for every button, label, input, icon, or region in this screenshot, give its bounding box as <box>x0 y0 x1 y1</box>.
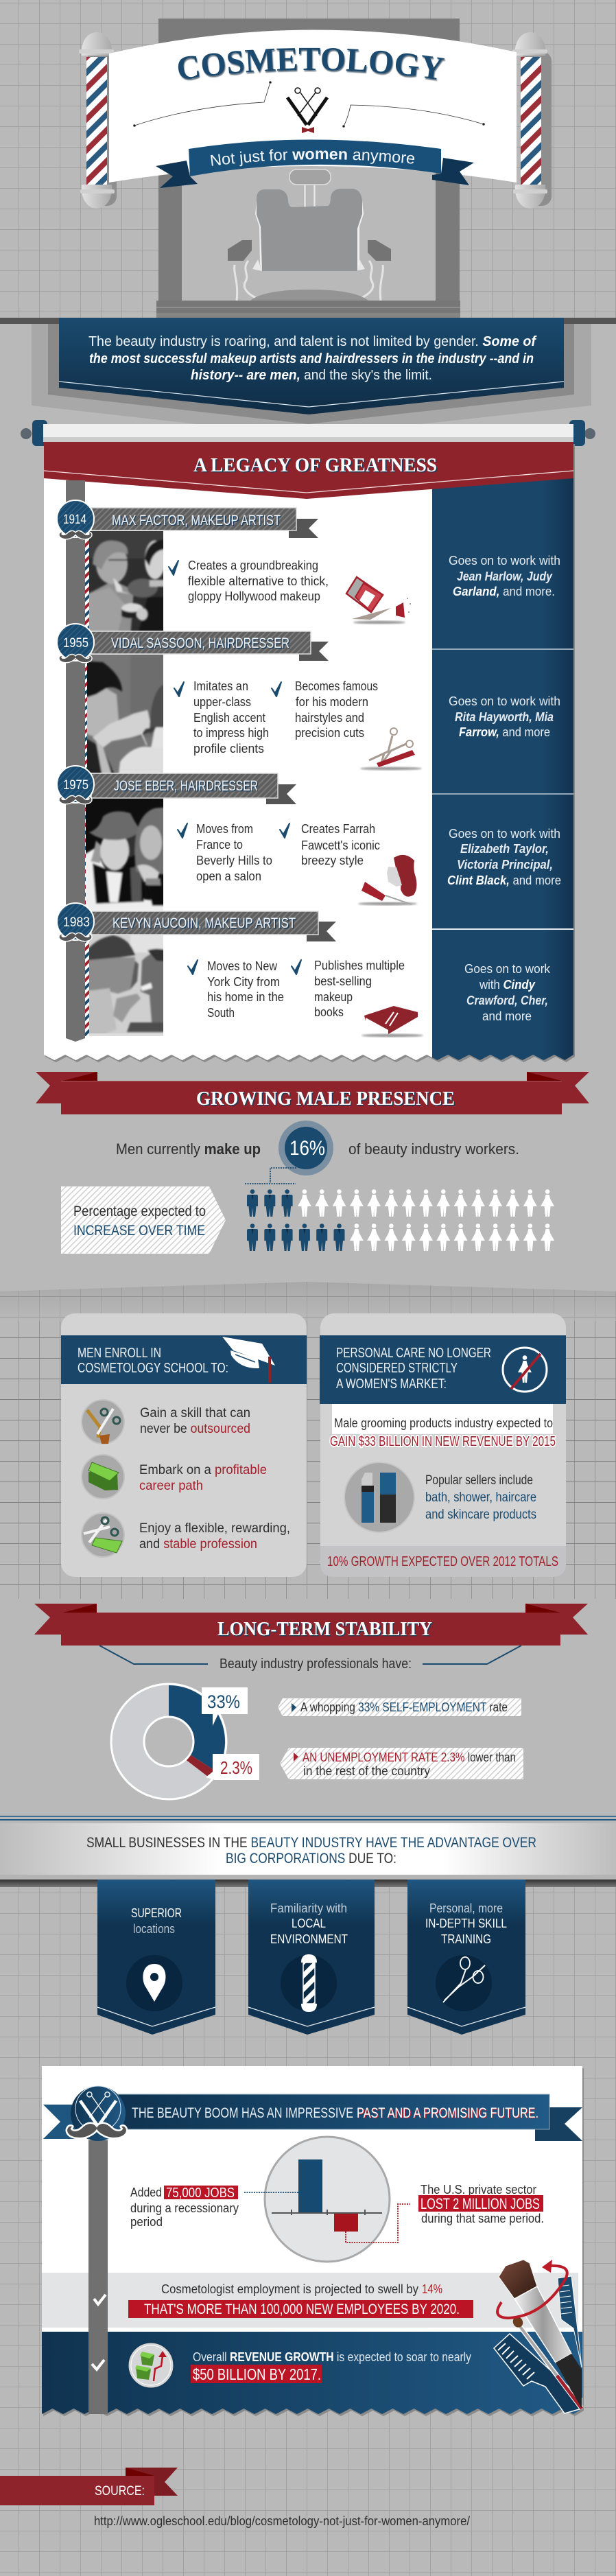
name badge <box>57 500 318 539</box>
section heading: A LEGACY OF GREATNESS <box>193 454 437 476</box>
accomplishments <box>178 822 380 883</box>
goes on to work with: Clint Black, and more <box>447 874 561 887</box>
tag: self-employment rate <box>278 1698 521 1716</box>
icon: graduation cap <box>222 1337 275 1383</box>
icon: map pin <box>126 1955 182 2011</box>
accomplishments: Becomes famous <box>295 679 378 693</box>
tag: unemployment rate: in the rest of the country <box>303 1764 430 1778</box>
panel header: PERSONAL CARE NO LONGER <box>336 1346 491 1361</box>
pennant: in-depth skill training: TRAINING <box>441 1932 491 1946</box>
small businesses band <box>0 1823 616 1887</box>
accomplishments: Beverly Hills to <box>196 854 272 867</box>
intro text: the most successful makeup artists and hairdressers in the industry --and in <box>89 351 534 366</box>
fact: employment projected to swell <box>128 2282 473 2318</box>
accomplishments: Moves to New <box>207 959 278 973</box>
icon: grooming bottles <box>344 1462 414 1532</box>
panel: men enroll in cosmetology school <box>61 1313 307 1577</box>
subheading with connector lines: Beauty industry professionals have: <box>220 1656 412 1672</box>
item: profitable career path: career path <box>139 1479 203 1493</box>
accomplishments: Creates Farrah <box>301 822 375 836</box>
icon: woman with curly hair and comb <box>358 855 417 906</box>
growth fact: Male grooming products industry expected to <box>334 1416 553 1430</box>
pictogram: workers row 1 <box>247 1189 554 1217</box>
source ribbon: SOURCE: <box>95 2484 145 2498</box>
accomplishments: York City from <box>207 975 280 989</box>
label: 2.3 percent: 2.3% <box>220 1757 252 1778</box>
name badge: 1983 <box>63 915 90 930</box>
accomplishments: profile clients <box>193 742 264 756</box>
scroll rod <box>21 420 595 446</box>
pennant: in-depth skill training <box>407 1880 525 2035</box>
subheading with connector lines <box>99 1646 521 1672</box>
goes on to work with: Victoria Principal, <box>457 858 553 871</box>
intro text <box>88 334 537 383</box>
popular sellers text: bath, shower, haircare <box>425 1490 536 1505</box>
icon: no women sign <box>503 1348 547 1392</box>
subtitle text: Not just for women anymore <box>211 150 414 166</box>
accomplishments: to impress high <box>193 726 269 740</box>
accomplishments: flexible alternative to thick, <box>188 574 329 588</box>
stat: men make up 16 percent: of beauty industry workers. <box>348 1140 519 1158</box>
tag: unemployment rate: AN UNEMPLOYMENT RATE 2.3% lower than <box>303 1750 516 1764</box>
goes on to work with: with Cindy <box>479 978 536 992</box>
fact: lost 2 million jobs <box>418 2183 544 2225</box>
timeline entry 1955 <box>57 624 560 780</box>
fact: revenue growth: Overall REVENUE GROWTH is expected to soar to nearly <box>193 2350 471 2364</box>
stat: men make up 16 percent: 16% <box>289 1137 325 1160</box>
goes on to work with <box>449 554 560 598</box>
fact: lost 2 million jobs: during that same period. <box>421 2212 544 2225</box>
band text: BIG CORPORATIONS DUE TO: <box>226 1851 396 1866</box>
goes on to work with: Garland, and more. <box>453 585 555 598</box>
intro banner shadows <box>32 324 591 436</box>
accomplishments: Creates a groundbreaking <box>188 559 318 572</box>
accomplishments: gloppy Hollywood makeup <box>188 589 320 603</box>
goes on to work with: and more <box>482 1009 532 1023</box>
goes on to work with <box>464 962 551 1023</box>
name badge: VIDAL SASSOON, HAIRDRESSER <box>111 635 289 651</box>
item: profitable career path <box>82 1455 267 1499</box>
band text: SMALL BUSINESSES IN THE BEAUTY INDUSTRY HAVE THE ADVANTAGE OVER <box>86 1835 536 1851</box>
accomplishments: Imitates an <box>193 679 248 693</box>
panel header <box>61 1335 307 1384</box>
barber pole left <box>79 32 117 209</box>
ribbon: growing male presence <box>36 1072 589 1114</box>
accomplishments <box>174 679 378 756</box>
fact: added 75,000 jobs: period <box>130 2215 163 2229</box>
label: 33 percent: 33% <box>207 1691 240 1712</box>
check marks <box>92 2295 106 2369</box>
fact: employment projected to swell: THAT'S MORE THAN 100,000 NEW EMPLOYEES BY 2020. <box>144 2302 460 2317</box>
header ribbon: PAST AND A PROMISING FUTURE. <box>357 2105 538 2121</box>
popular sellers text: and skincare products <box>425 1508 536 1522</box>
scissors and comb logo <box>287 88 327 125</box>
goes on to work with: Goes on to work with <box>449 827 560 841</box>
photo: Jose Eber <box>86 799 163 911</box>
goes on to work with: Jean Harlow, Judy <box>457 570 553 583</box>
fact: revenue growth: $50 BILLION BY 2017. <box>193 2365 321 2383</box>
pennant: in-depth skill training: IN-DEPTH SKILL <box>425 1917 507 1930</box>
source ribbon <box>0 2468 178 2505</box>
name badge: 1914 <box>63 513 86 527</box>
red header banner <box>44 442 573 499</box>
badge with scissors and moustache <box>67 2086 127 2141</box>
panel header: MEN ENROLL IN <box>78 1346 161 1361</box>
fact: added 75,000 jobs: Added <box>130 2186 162 2199</box>
small comb <box>558 2276 582 2367</box>
large brush <box>499 2260 537 2299</box>
accomplishments: Moves from <box>196 822 253 836</box>
accomplishments: Fawcett's iconic <box>301 839 380 852</box>
source url: http://www.ogleschool.edu/blog/cosmetology-not-just-for-women-anymore/ <box>94 2514 470 2528</box>
timeline entry 1975 <box>57 766 561 920</box>
panel: legacy of greatness <box>21 420 595 1066</box>
goes on to work with: Goes on to work <box>464 962 551 976</box>
accomplishments: books <box>314 1005 344 1019</box>
fact: employment projected to swell: 14% <box>422 2282 442 2296</box>
pennant: local environment: LOCAL <box>292 1917 326 1930</box>
accomplishments: for his modern <box>296 695 368 709</box>
accomplishments: breezy style <box>301 854 364 867</box>
white arch banner <box>109 30 517 183</box>
subtitle ribbon <box>156 140 474 188</box>
timeline entry 1983 <box>57 903 551 1043</box>
icon: barber pole <box>281 1954 337 2012</box>
photo: Max Factor <box>89 531 163 631</box>
accomplishments: Publishes multiple <box>314 959 405 972</box>
panel: beauty boom <box>42 2066 584 2417</box>
bow tie <box>302 127 314 133</box>
name badge <box>57 624 329 663</box>
fact: revenue growth <box>128 2343 471 2388</box>
pennant: local environment: ENVIRONMENT <box>270 1932 348 1946</box>
barber pole right <box>512 32 552 209</box>
popular sellers text <box>425 1473 536 1522</box>
panel header <box>320 1335 566 1404</box>
item: gain a skill: Gain a skill that can <box>140 1406 250 1420</box>
panel header: COSMETOLOGY SCHOOL TO: <box>78 1361 228 1376</box>
item: profitable career path: Embark on a profitable <box>139 1463 267 1477</box>
fact: employment projected to swell: Cosmetologist employment is projected to swell by <box>161 2282 418 2296</box>
section heading: GROWING MALE PRESENCE <box>196 1088 455 1110</box>
name badge <box>57 766 296 804</box>
fact: lost 2 million jobs: The U.S. private sector <box>420 2183 536 2197</box>
name badge: 1955 <box>63 636 88 651</box>
accomplishments <box>188 959 405 1020</box>
thin brush <box>517 2323 582 2409</box>
label: 33 percent <box>202 1687 248 1726</box>
accomplishments: his home in the <box>207 990 284 1004</box>
item: stable profession <box>82 1513 290 1557</box>
goes on to work with <box>449 694 560 739</box>
header window frame <box>156 19 460 318</box>
goes on to work with: Goes on to work with <box>449 554 560 567</box>
pennant: in-depth skill training: Personal, more <box>429 1901 503 1915</box>
intro text: history-- are men, and the sky's the limit. <box>191 368 432 383</box>
goes on to work with: Farrow, and more <box>459 725 550 739</box>
name badge: 1975 <box>63 778 88 793</box>
intro text: The beauty industry is roaring, and talent is not limited by gender. Some of <box>88 334 537 349</box>
name badge <box>57 903 336 941</box>
name badge: KEVYN AUCOIN, MAKEUP ARTIST <box>112 915 296 931</box>
accomplishments: hairstyles and <box>295 711 364 725</box>
callout: increase over time: Percentage expected to <box>73 1204 206 1219</box>
large comb <box>494 2334 582 2413</box>
photo: Kevyn Aucoin <box>89 935 163 1036</box>
goes on to work with: Elizabeth Taylor, <box>460 842 549 856</box>
pennant: local environment <box>248 1880 375 2035</box>
stat: men make up 16 percent: Men currently make up <box>116 1140 261 1158</box>
pennant: superior locations: locations <box>133 1922 175 1936</box>
goes on to work with: Rita Hayworth, Mia <box>455 710 554 724</box>
red arrow <box>497 2266 567 2318</box>
item: stable profession: Enjoy a flexible, rewarding, <box>139 1521 290 1536</box>
illustration: brushes and combs <box>494 2260 582 2413</box>
icon: scissors and comb <box>360 728 422 770</box>
dark ledge strip <box>0 318 616 324</box>
pennant: superior locations <box>97 1880 215 2035</box>
label: 2.3 percent <box>206 1754 259 1780</box>
accomplishments <box>169 559 329 603</box>
icon: book with brushes <box>362 1006 423 1038</box>
timeline bar <box>66 480 89 1042</box>
growth fact <box>330 1404 556 1449</box>
fact: added 75,000 jobs: 75,000 JOBS <box>166 2186 235 2201</box>
band text <box>86 1835 536 1866</box>
accomplishments: upper-class <box>193 695 251 709</box>
accomplishments: English accent <box>193 711 265 725</box>
timeline bar <box>88 2140 108 2414</box>
item: stable profession: and stable profession <box>139 1537 257 1552</box>
accomplishments: makeup <box>314 990 353 1004</box>
icon: money with rising arrow <box>128 2343 174 2388</box>
accomplishments: open a salon <box>196 869 261 883</box>
dotted connector <box>245 1168 296 1184</box>
panel: personal care market <box>320 1313 566 1577</box>
donut chart <box>111 1684 259 1799</box>
accomplishments: precision cuts <box>295 726 364 740</box>
pennant: superior locations: SUPERIOR <box>131 1906 182 1920</box>
tag: self-employment rate: A whopping 33% SELF-EMPLOYMENT rate <box>300 1700 508 1714</box>
accomplishments: best-selling <box>314 974 372 988</box>
timeline entry 1914 <box>57 500 560 638</box>
dotted connectors <box>244 2192 410 2243</box>
title: COSMETOLOGY <box>178 48 446 82</box>
tag: unemployment rate <box>280 1748 523 1779</box>
bar chart in circle <box>265 2137 390 2262</box>
photo: Vidal Sassoon <box>87 655 163 773</box>
item: gain a skill <box>82 1400 250 1444</box>
header ribbon: THE BEAUTY BOOM HAS AN IMPRESSIVE <box>132 2105 353 2121</box>
callout: increase over time <box>61 1186 226 1254</box>
divider lines <box>0 1816 616 1820</box>
accomplishments: South <box>207 1006 235 1020</box>
goes on to work with: Goes on to work with <box>449 694 560 708</box>
pictogram: workers row 2 <box>247 1223 554 1251</box>
grid section background <box>0 1282 616 1599</box>
panel header: CONSIDERED STRICTLY <box>336 1361 458 1376</box>
title decorative connector lines <box>134 82 484 127</box>
ribbon: long-term stability <box>34 1604 588 1646</box>
goes on to work with <box>447 827 561 887</box>
popular sellers text: Popular sellers include <box>425 1473 533 1488</box>
fact: added 75,000 jobs: during a recessionary <box>130 2201 239 2215</box>
intro banner <box>59 318 564 414</box>
header ribbon <box>43 2086 582 2141</box>
item: gain a skill: never be outsourced <box>140 1422 250 1436</box>
fact: lost 2 million jobs: LOST 2 MILLION JOBS <box>420 2195 540 2212</box>
name badge: JOSE EBER, HAIRDRESSER <box>114 778 258 794</box>
panel header: A WOMEN'S MARKET: <box>336 1377 447 1392</box>
stat: men make up 16 percent <box>116 1121 519 1175</box>
section heading: LONG-TERM STABILITY <box>217 1618 432 1640</box>
fact: added 75,000 jobs <box>130 2186 239 2229</box>
goes on to work with: Crawford, Cher, <box>466 994 548 1007</box>
name badge: MAX FACTOR, MAKEUP ARTIST <box>112 513 281 528</box>
icon: scissors <box>436 1955 492 2011</box>
barber chair <box>228 169 391 301</box>
accomplishments: France to <box>196 838 243 852</box>
icon: makeup compact <box>346 577 411 624</box>
callout: increase over time: INCREASE OVER TIME <box>73 1223 205 1239</box>
pennant: local environment: Familiarity with <box>270 1901 347 1915</box>
